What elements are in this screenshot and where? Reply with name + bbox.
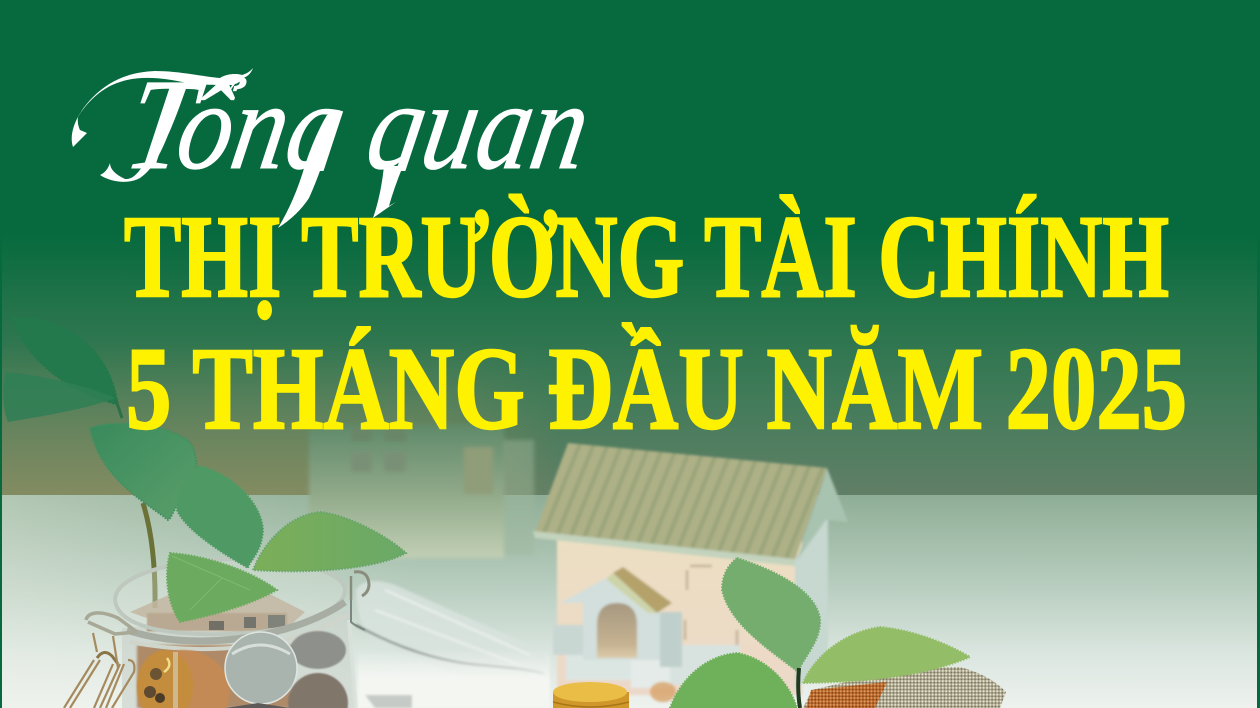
script letters: Tổng quan (117, 52, 601, 197)
plant stem in jar (143, 503, 155, 608)
roof (535, 443, 827, 560)
leaf stem (798, 668, 800, 708)
main toy house (533, 443, 848, 695)
small wall details (685, 566, 737, 650)
house wall (557, 540, 802, 695)
small coin cluster behind leaves (650, 682, 676, 702)
coins and contents at the rim (130, 590, 305, 632)
leaf: right (253, 512, 406, 571)
doghouse door (597, 603, 637, 658)
gold coins (553, 682, 629, 708)
jar clasps and wires (64, 572, 369, 708)
faded leaves at top left (3, 318, 122, 422)
title script: Tổng quan (72, 68, 584, 228)
jar body (122, 610, 356, 708)
house side wall (795, 500, 828, 690)
burlap sack (803, 667, 1006, 708)
doghouse body (560, 577, 660, 660)
leaf: lower centre, round (670, 653, 797, 708)
descender of q (373, 166, 403, 218)
leaf: front (167, 553, 277, 622)
leaf: large middle (90, 423, 197, 520)
copper coins (138, 650, 230, 708)
glass lid (356, 581, 551, 708)
flourish of the T: stem and foot (100, 83, 188, 182)
roof eave (533, 531, 795, 566)
glass jar with coins (115, 559, 365, 708)
jar rim (115, 559, 345, 634)
grey coins (290, 631, 346, 669)
background house (out of focus) (309, 425, 534, 558)
roof gable (797, 468, 848, 560)
background: table surface (0, 495, 1260, 708)
doghouse roof (613, 567, 672, 613)
background: green wall (2, 253, 1257, 495)
doghouse base steps (553, 625, 583, 655)
leaf: upper centre (177, 466, 263, 568)
descender of g (278, 113, 338, 228)
leaf: lower right, tall (722, 558, 820, 672)
flourish of the T: bar and tail (72, 68, 253, 147)
leaf: lower right, long (803, 627, 970, 683)
